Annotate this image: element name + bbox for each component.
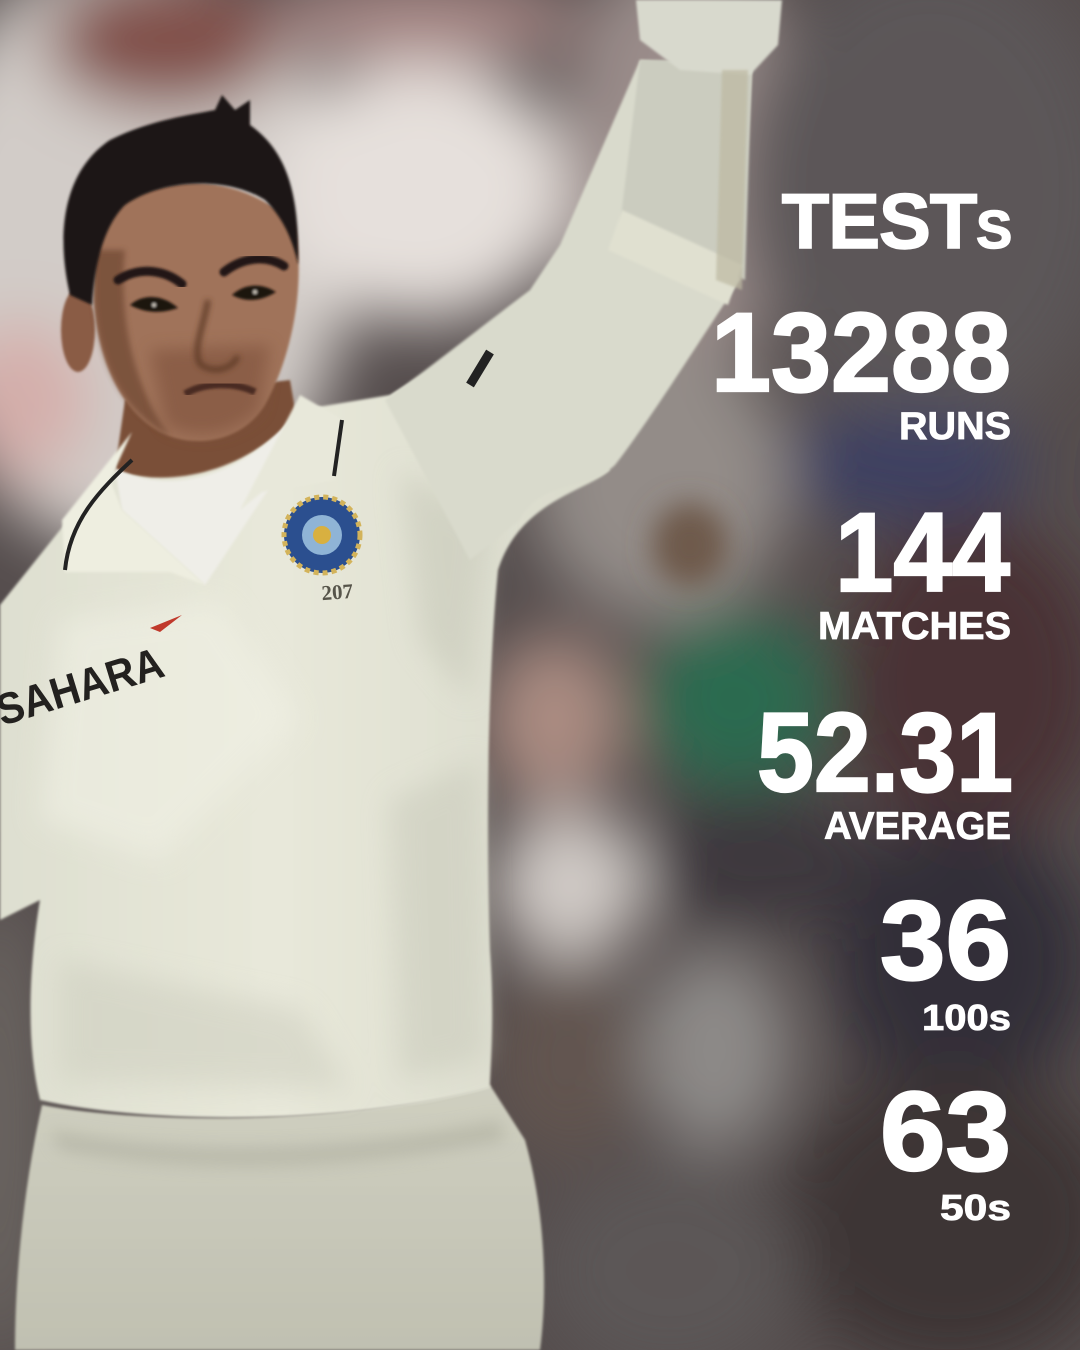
stat: runs: RUNS <box>899 405 1011 448</box>
stat: fifties: 63 <box>880 1069 1011 1194</box>
stat: average: 52.31 <box>757 690 1013 815</box>
glove <box>636 0 782 75</box>
forearm guard <box>620 60 752 280</box>
collar right <box>240 395 340 510</box>
stat: matches: 144 <box>835 490 1010 615</box>
eyes <box>130 286 276 312</box>
raised sleeve and arm <box>385 60 752 560</box>
lower face shadow <box>150 345 270 435</box>
badge <box>284 497 360 573</box>
nose <box>197 300 238 370</box>
trousers <box>15 1085 544 1350</box>
shirt shading <box>40 470 490 1090</box>
collar stripes <box>65 420 342 570</box>
sponsor mark <box>150 615 182 632</box>
stat: hundreds: 100s <box>922 997 1011 1038</box>
neck skin <box>115 380 296 478</box>
eyebrows <box>118 259 284 284</box>
stat: matches: MATCHES <box>818 605 1011 648</box>
stat: matches <box>818 490 1011 648</box>
stat: average: AVERAGE <box>824 805 1011 848</box>
ear <box>61 288 95 372</box>
elbow strap <box>608 210 742 305</box>
white undershirt <box>115 410 298 585</box>
shirt number: 207 <box>321 579 354 605</box>
face shading <box>94 250 170 436</box>
hair <box>63 95 298 305</box>
stat: fifties: 50s <box>940 1187 1011 1228</box>
collar left <box>62 432 205 585</box>
stat: runs: 13288 <box>711 290 1011 415</box>
sleeve logo <box>470 352 490 385</box>
trouser folds <box>50 1120 505 1166</box>
face <box>94 183 299 441</box>
stats column <box>711 177 1013 1228</box>
mouth <box>185 385 255 394</box>
shirt body <box>0 340 610 1117</box>
heading: tests: TESTS <box>782 177 1011 265</box>
player photo <box>0 0 782 1350</box>
stat: hundreds: 36 <box>880 878 1011 1003</box>
